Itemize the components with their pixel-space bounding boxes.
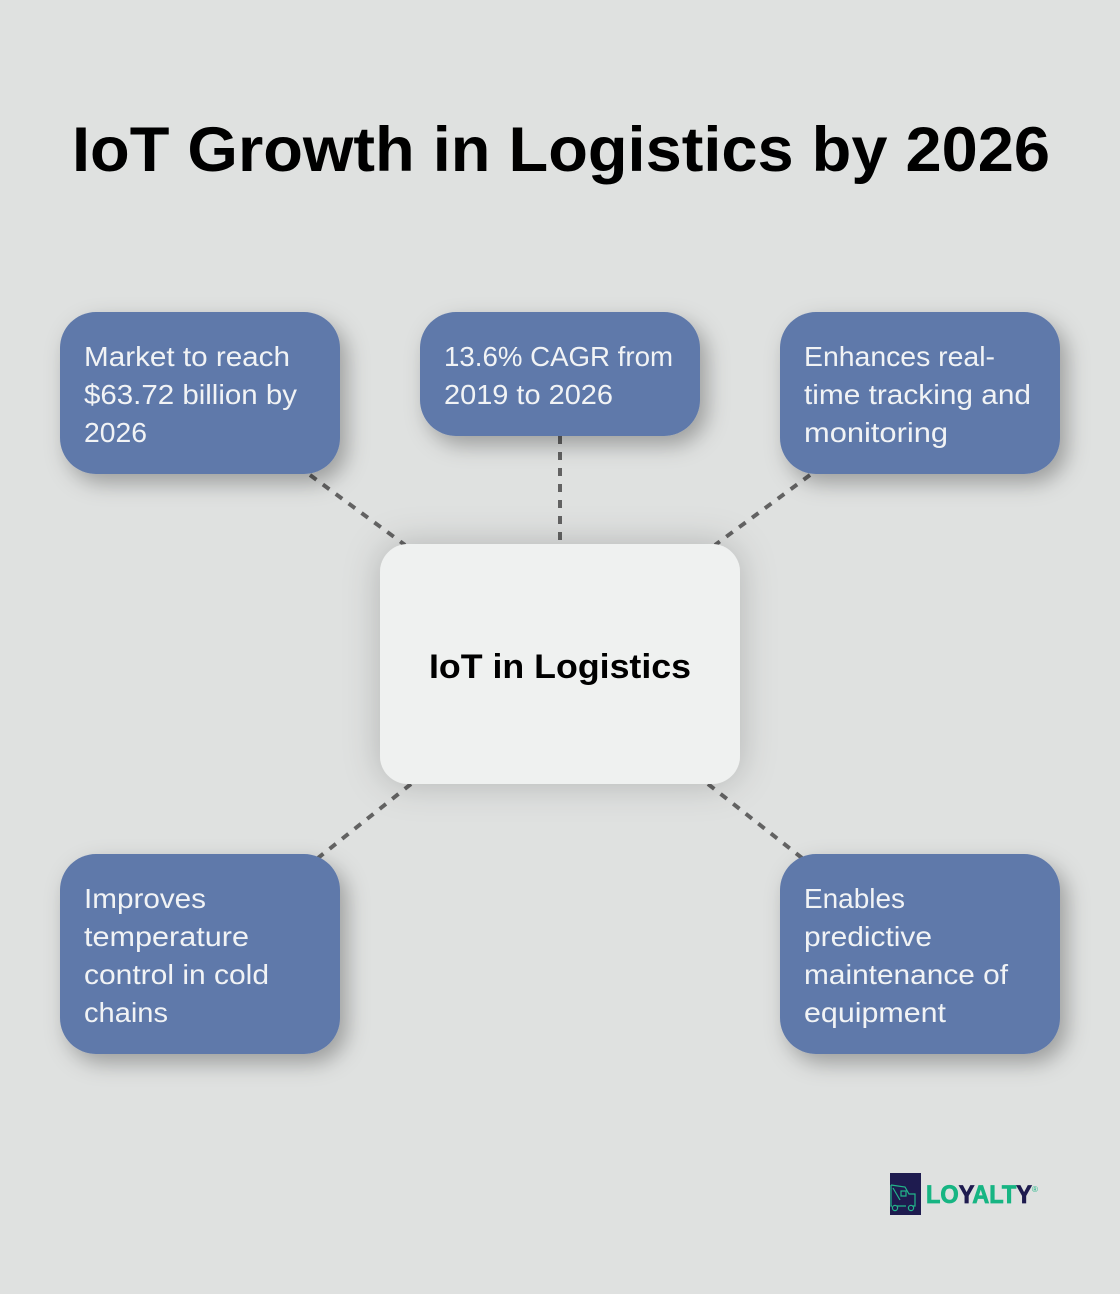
registered mark: ® [1032, 1185, 1038, 1194]
panel: maintenance [780, 854, 1060, 1054]
market size text [84, 341, 297, 448]
maintenance text: predictive [804, 921, 932, 952]
cold chain text [84, 883, 269, 1028]
logo wordmark: LOYALTY [926, 1181, 1032, 1209]
icon: truck badge [890, 1173, 921, 1215]
tracking text: monitoring [804, 417, 948, 448]
panel: cold chain [60, 854, 340, 1054]
tracking text: time tracking and [804, 379, 1031, 410]
tracking text: Enhances real- [804, 341, 995, 372]
cold chain text: chains [84, 997, 168, 1028]
CAGR text: 2019 to 2026 [444, 379, 613, 410]
maintenance text: maintenance of [804, 959, 1008, 990]
cold chain text: temperature [84, 921, 249, 952]
connector lines [310, 436, 810, 858]
CAGR text: 13.6% CAGR from [444, 341, 673, 372]
maintenance text: Enables [804, 883, 905, 914]
maintenance text: equipment [804, 997, 946, 1028]
panel: CAGR [420, 312, 700, 436]
maintenance text [804, 883, 1008, 1028]
cold chain text: Improves [84, 883, 206, 914]
cold chain text: control in cold [84, 959, 269, 990]
tracking text [804, 341, 1031, 448]
center label: IoT in Logistics [429, 648, 691, 686]
market size text: $63.72 billion by [84, 379, 297, 410]
panel: center node [380, 544, 740, 784]
market size text: Market to reach [84, 341, 290, 372]
CAGR text [444, 341, 673, 410]
title: IoT Growth in Logistics by 2026 [72, 115, 1050, 185]
logo [890, 1173, 1038, 1215]
panel: market size [60, 312, 340, 474]
panel: tracking [780, 312, 1060, 474]
market size text: 2026 [84, 417, 147, 448]
